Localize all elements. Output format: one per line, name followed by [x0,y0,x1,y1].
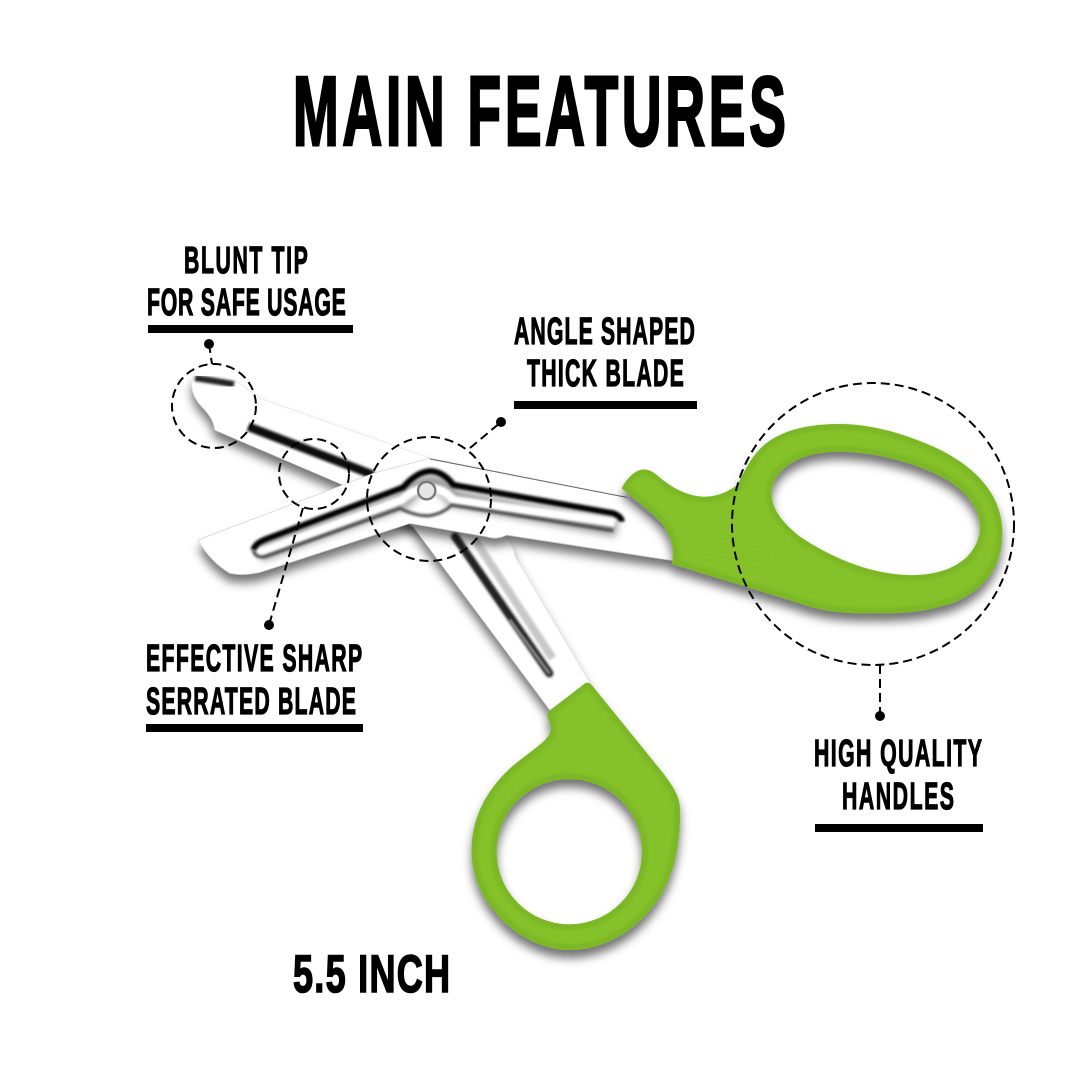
callout circle [172,364,256,448]
title: MAIN FEATURES [293,56,786,166]
size label: 5.5 INCH [293,944,450,1004]
groove: tip streak [195,378,234,384]
handle: moulded grip outline [694,533,770,562]
callout circle [279,439,349,509]
callout circle [732,383,1014,665]
underline [514,401,697,409]
pivot rivet [418,482,435,499]
label: FOR SAFE USAGE [147,280,346,324]
groove: upper arm [248,427,373,475]
handle: small green loop [472,683,680,950]
label [146,636,362,723]
label [147,238,346,324]
blade: serrated arm with pivot [198,458,680,574]
callout: angle shaped blade [367,309,697,561]
leader dot [496,417,506,427]
callout: blunt tip [147,238,353,448]
underline [146,724,363,732]
scissors [192,375,1002,950]
leader line [209,344,212,364]
callout circle [367,437,491,561]
handle: large green loop [622,424,1002,613]
groove: lower leg [455,537,549,673]
groove: upper dark edge [253,471,622,550]
label [514,309,695,395]
leader line [879,665,881,716]
label: HIGH QUALITY [814,731,982,775]
label [814,731,982,818]
leader line [470,422,501,448]
groove: shaded channel [260,483,617,553]
leader dot [875,711,885,721]
underline [815,824,983,832]
underline [148,325,353,333]
leader dot [204,339,214,349]
label: HANDLES [842,774,954,818]
groove: lower leg highlight [475,540,553,658]
label: BLUNT TIP [184,238,308,282]
leader dot [264,620,274,630]
blade: blunt tip arm and lower leg [192,375,590,710]
leader line [269,508,303,625]
label: EFFECTIVE SHARP [146,636,362,680]
label: SERRATED BLADE [146,679,356,723]
groove: lower dark edge [253,505,613,557]
callout: handles [732,383,1014,832]
callout: serrated blade [146,439,363,732]
label: THICK BLADE [527,351,684,395]
label: ANGLE SHAPED [514,309,695,353]
